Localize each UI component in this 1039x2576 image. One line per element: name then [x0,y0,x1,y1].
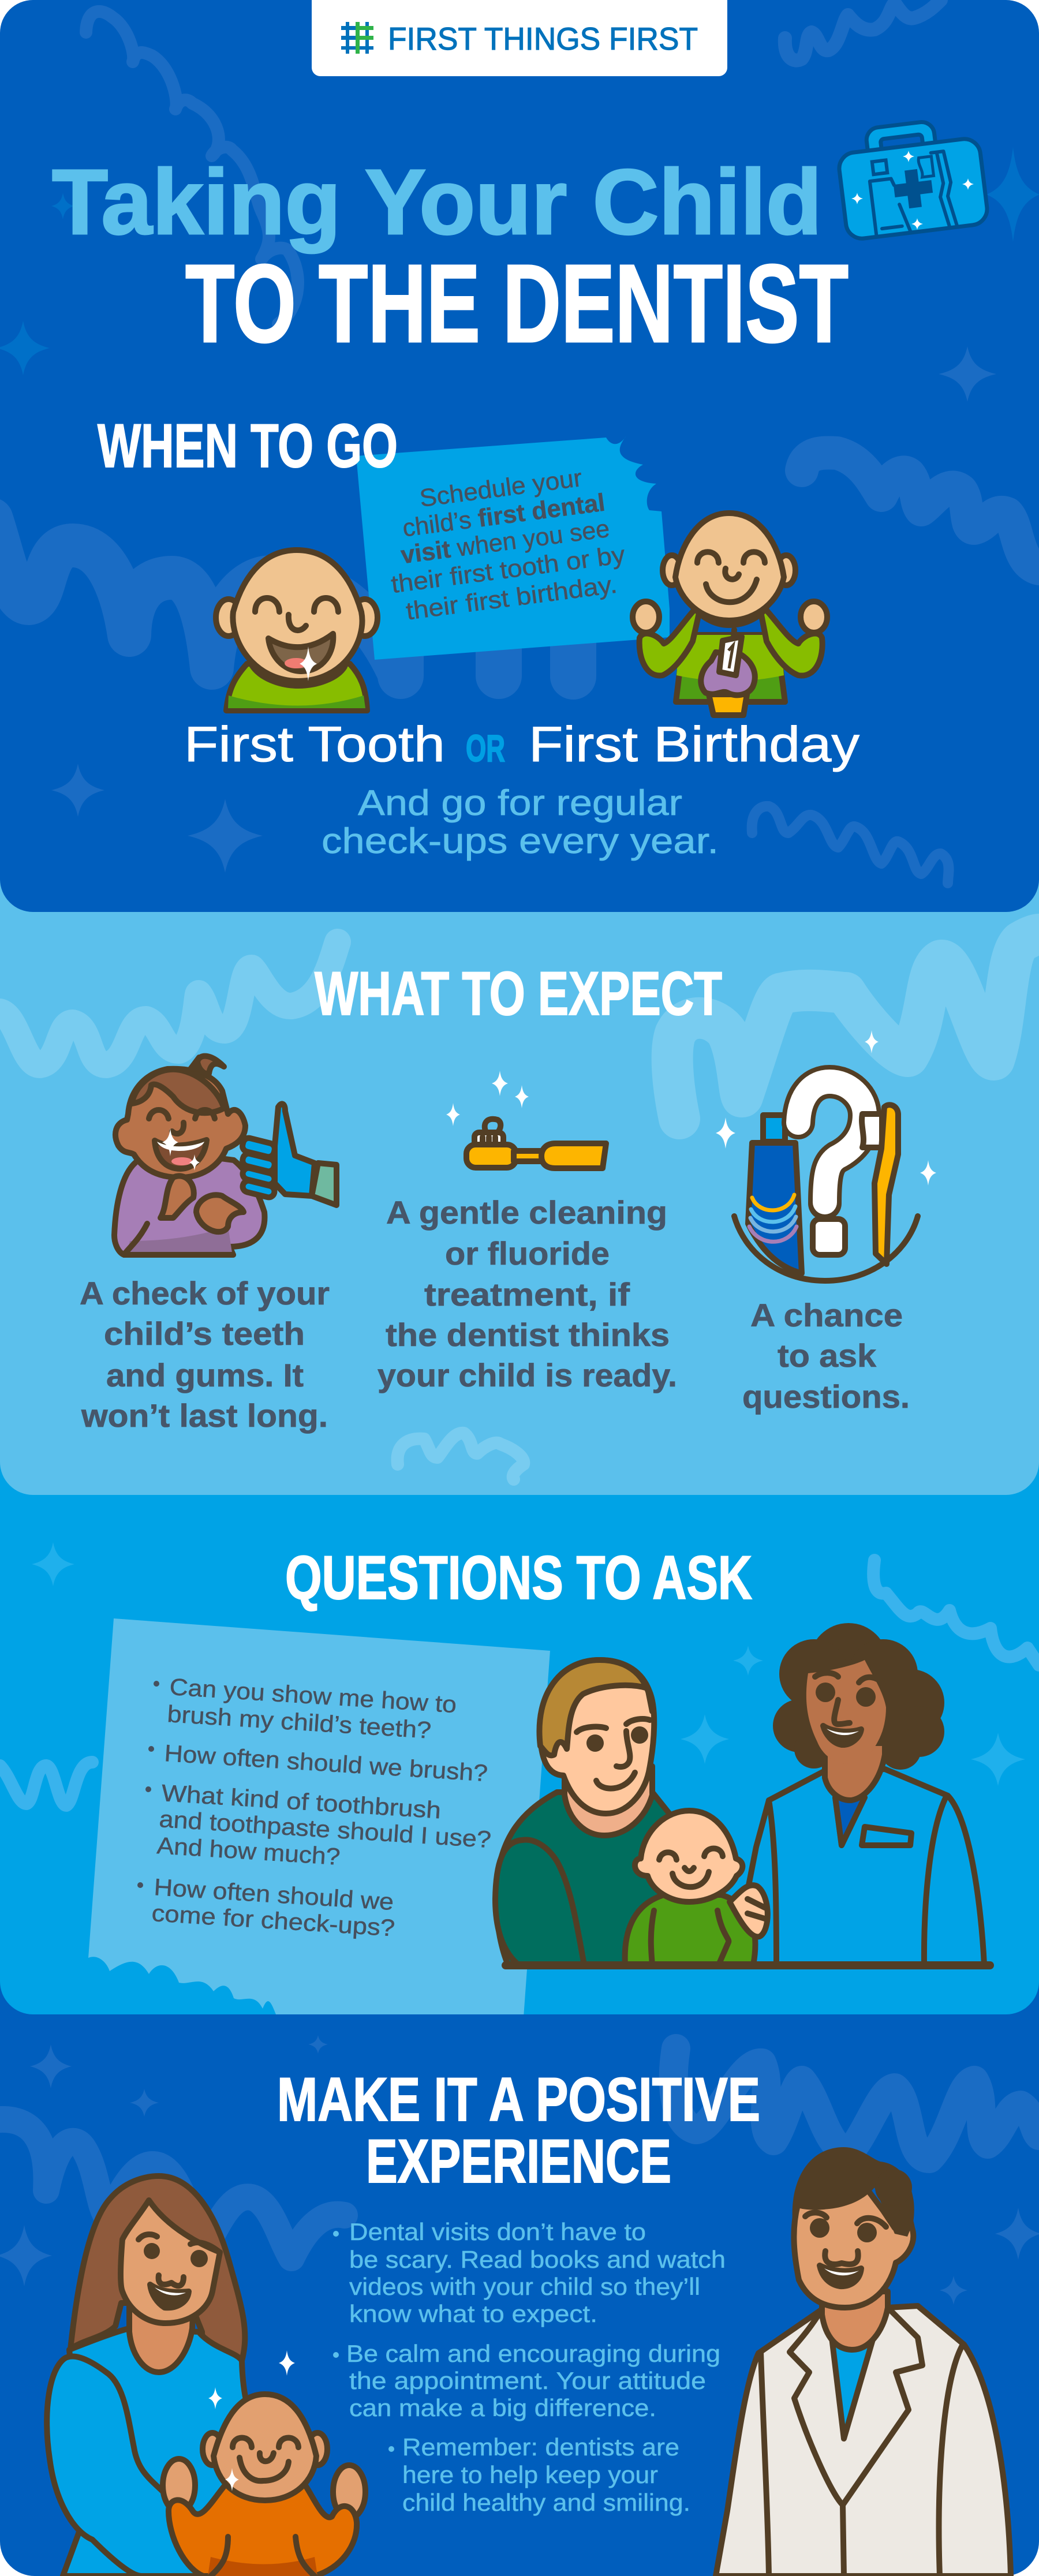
illustration: child with thumbs-up glove [114,1056,337,1255]
label: first birthday: First Birthday [529,717,859,772]
text block: callout copy: their first tooth or by [390,541,627,599]
illustration: male dentist [716,2147,1011,2576]
text block: check of teeth and gums: won’t last long. [81,1397,328,1434]
label: first tooth: First Tooth [184,717,445,772]
text block: question list [137,1673,492,1941]
text block: positive experience tips: be scary. Read books and watch [349,2246,726,2273]
heading: make it a positive experience: EXPERIENCE [366,2126,671,2196]
illustration: baby with cupcake [633,513,827,715]
title: Taking Your Child [52,150,822,253]
text block: gentle cleaning or fluoride: A gentle cleaning [386,1194,667,1231]
text block: gentle cleaning or fluoride: the dentist thinks [386,1317,670,1353]
icon: medical kit [835,115,989,240]
text block: question list: What kind of toothbrush [160,1779,442,1823]
text block: chance to ask questions: to ask [778,1337,877,1374]
text block: gentle cleaning or fluoride: or fluoride [445,1235,610,1272]
text block: question list: come for check-ups? [151,1900,395,1941]
icon: toothbrush [446,1071,606,1168]
text block: positive experience tips: videos with your child so they’ll [349,2273,700,2300]
text block: check of teeth and gums [80,1275,330,1434]
text block: question list: And how much? [156,1832,341,1870]
text block: chance to ask questions [742,1297,910,1415]
panel: what to expect [0,866,1039,1495]
text block: question list: How often should we [153,1874,395,1915]
text block: positive experience tips: Be calm and encouraging during [346,2340,720,2367]
question card [88,1618,550,2017]
text block: question list: How often should we brush? [163,1740,488,1786]
text block: callout copy: their first birthday. [405,571,619,626]
text block: question list: Can you show me how to [169,1673,457,1718]
text block: callout copy: Schedule your [418,464,584,513]
text block: positive experience tips: Remember: dentists are [402,2433,679,2461]
illustration: baby with first tooth [216,550,378,711]
text block: gentle cleaning or fluoride: your child is ready. [378,1357,677,1393]
text block: question list: and toothpaste should I use? [158,1805,492,1853]
illustration: mother and baby [47,2176,365,2576]
base line [502,1961,994,1969]
text block: question list: brush my child’s teeth? [166,1700,432,1744]
label: or: OR [466,727,505,769]
text block: check of teeth and gums: A check of your [80,1275,330,1311]
panel: make it a positive experience [0,1962,1039,2576]
title [52,150,849,365]
text block: gentle cleaning or fluoride: treatment, if [424,1276,630,1313]
text block: callout copy: visit when you see [399,515,611,569]
text block: regular check-ups [322,783,719,861]
logo icon [341,22,373,54]
text block: callout copy: child’s first dental [401,489,607,543]
heading: questions to ask: QUESTIONS TO ASK [285,1543,752,1612]
text block: chance to ask questions: questions. [742,1378,910,1415]
text block: chance to ask questions: A chance [750,1297,903,1333]
text block: positive experience tips: here to help keep your [402,2461,658,2488]
icon: sparkles [208,2350,295,2491]
text block: callout copy [390,464,627,626]
text block: regular check-ups: check-ups every year. [322,821,719,861]
logo tab [312,0,727,76]
panel: questions to ask [0,1443,1039,2017]
heading: when to go: WHEN TO GO [98,411,398,480]
icon: question mark, toothpaste and toothbrush [716,1030,936,1281]
text block: regular check-ups: And go for regular [358,783,682,823]
heading: make it a positive experience: MAKE IT A POSITIVE [277,2065,760,2134]
text block: positive experience tips: know what to expect. [349,2300,597,2327]
text block: check of teeth and gums: and gums. It [106,1357,304,1393]
text block: gentle cleaning or fluoride [378,1194,677,1393]
text block: positive experience tips: child healthy and smiling. [402,2489,690,2516]
text block: positive experience tips [333,2218,726,2516]
heading: make it a positive experience [277,2065,760,2196]
illustration: father holding baby [495,1660,768,1965]
blue callout card [356,436,670,660]
text block: check of teeth and gums: child’s teeth [104,1315,305,1352]
logo wordmark: FIRST THINGS FIRST [388,21,698,57]
panel: when to go [0,0,1039,912]
text block: positive experience tips: the appointment. Your attitude [349,2367,706,2394]
heading: what to expect: WHAT TO EXPECT [315,959,722,1028]
illustration: dentist with curly hair [733,1623,984,1965]
text block: positive experience tips: Dental visits don’t have to [349,2218,646,2245]
text block: positive experience tips: can make a big difference. [349,2394,656,2421]
